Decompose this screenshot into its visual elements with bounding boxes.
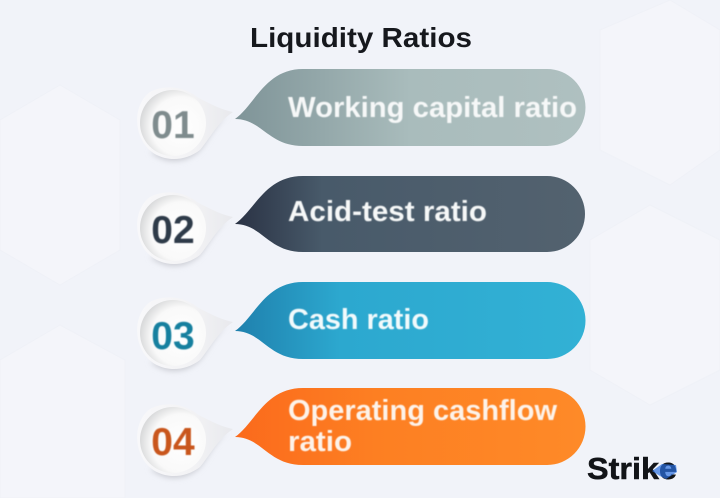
- logo: Strike: Strike: [587, 451, 677, 486]
- label 03: Cash ratio: [288, 304, 429, 336]
- label 04: Operating cashflow: [288, 395, 557, 427]
- badge 01: [137, 87, 233, 161]
- bar 01: [235, 69, 585, 146]
- label 02: Acid-test ratio: [288, 196, 487, 228]
- number 01: 01: [151, 104, 195, 147]
- number 02: 02: [151, 209, 195, 252]
- item 03: [137, 282, 586, 371]
- label 04: ratio: [288, 426, 352, 458]
- bar 02: [235, 176, 585, 252]
- title: Liquidity Ratios: [250, 22, 472, 53]
- bar 04: [235, 388, 586, 465]
- item 02: [137, 176, 585, 266]
- label 01: Working capital ratio: [288, 92, 577, 124]
- item 04: [137, 388, 586, 478]
- label 04: [288, 395, 557, 458]
- badge 04: [137, 404, 233, 478]
- item 01: [137, 69, 585, 161]
- badge 03: [137, 297, 233, 371]
- bar 03: [235, 282, 586, 359]
- number 04: 04: [151, 421, 195, 464]
- badge 02: [137, 192, 233, 266]
- number 03: 03: [151, 315, 195, 358]
- logo accent: [652, 464, 677, 479]
